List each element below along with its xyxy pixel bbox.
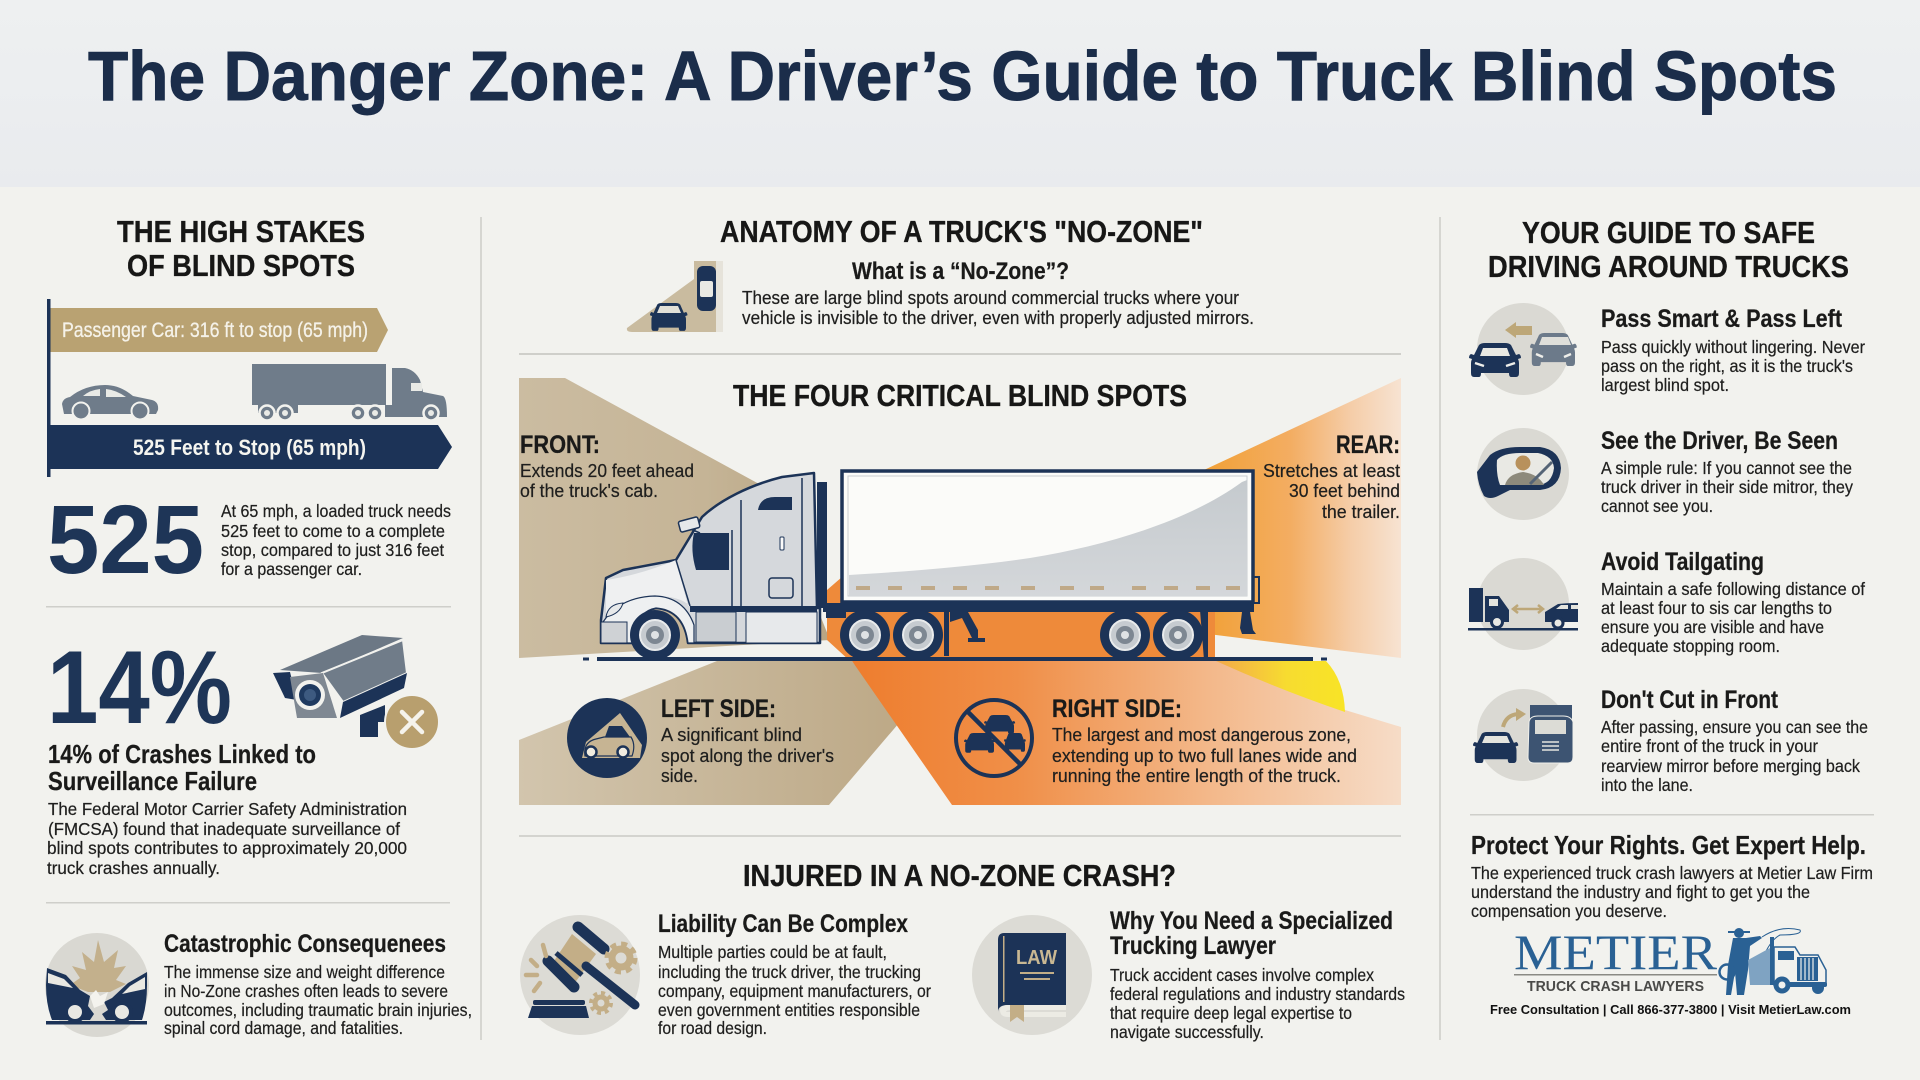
icon: car in blind spot [567, 698, 647, 778]
icon: top view cars in blind spot [627, 261, 723, 332]
label: front: of the truck's cab. [520, 480, 658, 501]
subheading: what is a no-zone: What is a “No-Zone”? [852, 258, 1069, 285]
text: don't cut in front [1601, 686, 1868, 795]
zone: yellow rear overlap [1216, 661, 1345, 712]
text: consequences description: spinal cord damage, and fatalities. [164, 1018, 403, 1038]
label: rear: 30 feet behind [1289, 480, 1400, 501]
heading: high stakes [117, 214, 365, 283]
text: 525 explanation: 525 feet to come to a complete [221, 521, 445, 541]
diagram: four blind spots around truck [519, 378, 1401, 805]
text: FMCSA finding: The Federal Motor Carrier Safety Administration [48, 799, 407, 819]
text: pass smart: Pass Smart & Pass Left [1601, 305, 1843, 333]
heading: anatomy: ANATOMY OF A TRUCK'S "NO-ZONE" [720, 214, 1203, 249]
icon: gavel [520, 915, 640, 1035]
cab [601, 473, 827, 643]
text: see the driver: A simple rule: If you cannot see the [1601, 458, 1852, 478]
text: left side: LEFT SIDE: [661, 695, 776, 723]
text: consequences description: The immense size and weight difference [164, 962, 445, 982]
label: rear: the trailer. [1322, 501, 1400, 522]
text: don't cut in front: entire front of the truck in your [1601, 736, 1818, 756]
wheels [630, 610, 1203, 660]
bar: passenger car stopping distance [50, 308, 388, 352]
subheading: 14 percent of crashes [48, 739, 316, 796]
text: FMCSA finding: truck crashes annually. [47, 858, 220, 878]
text: avoid tailgating: adequate stopping room. [1601, 636, 1780, 656]
icon: car crash [45, 933, 149, 1037]
text: liability: even government entities responsible [658, 1000, 920, 1020]
text: see the driver: See the Driver, Be Seen [1601, 427, 1838, 455]
text: specialized lawyer: that require deep legal expertise to [1110, 1003, 1352, 1023]
text: specialized lawyer: Truck accident cases involve complex [1110, 965, 1374, 985]
zone: under trailer overlap [827, 577, 1215, 661]
label: front: Extends 20 feet ahead [520, 460, 694, 481]
bar: passenger car stopping distance: Passenger Car: 316 ft to stop (65 mph) [62, 319, 368, 342]
stat: 525 feet: 525 [47, 485, 204, 594]
text: consequences description [164, 962, 472, 1038]
text: right side: extending up to two full lanes wide and [1052, 745, 1357, 766]
text: consequences description: in No-Zone crashes often leads to severe [164, 981, 448, 1001]
text: 525 explanation [221, 501, 451, 579]
text: left side: spot along the driver's [661, 745, 834, 766]
heading: your guide: DRIVING AROUND TRUCKS [1488, 249, 1849, 284]
logo: Metier truck crash lawyers: METIER [1514, 924, 1718, 980]
header band [0, 0, 1920, 187]
bar: truck stopping distance [48, 425, 452, 469]
trailer chassis [823, 603, 1256, 660]
text: right side: RIGHT SIDE: [1052, 695, 1182, 723]
icon: cowboy and truck [1720, 928, 1827, 995]
logo: Metier truck crash lawyers [1514, 924, 1827, 995]
text: don't cut in front: Don't Cut in Front [1601, 686, 1779, 714]
road line [597, 657, 1313, 661]
text: left side [661, 695, 834, 786]
label: front: FRONT: [520, 431, 600, 459]
panel: guide to safe driving [1468, 215, 1874, 1017]
icon: law book [972, 915, 1092, 1035]
text: specialized lawyer: Trucking Lawyer [1110, 932, 1276, 960]
zone: right side blind spot [852, 661, 1401, 805]
illustration: semi truck side view [583, 471, 1327, 660]
heading: four critical blind spots: THE FOUR CRITICAL BLIND SPOTS [733, 378, 1187, 413]
call to action: Protect Your Rights. Get Expert Help. [1471, 830, 1866, 860]
icon: passing cars [1469, 303, 1577, 395]
bar: truck stopping distance: 525 Feet to Stop (65 mph) [133, 435, 366, 460]
zone: front blind spot [519, 378, 830, 658]
callout: left side [567, 695, 834, 786]
label: rear: Stretches at least [1263, 460, 1400, 481]
call to action: understand the industry and fight to get you the [1471, 882, 1810, 902]
title: The Danger Zone: A Driver’s Guide to Truck Blind Spots [88, 37, 1837, 115]
text: no-zone definition: These are large blind spots around commercial trucks where your [742, 287, 1239, 308]
text: avoid tailgating: at least four to sis car lengths to [1601, 598, 1832, 618]
text: FMCSA finding: (FMCSA) found that inadequate surveillance of [48, 819, 400, 839]
text: right side [1052, 695, 1357, 786]
icon: passenger car [62, 385, 158, 420]
text: specialized lawyer: Why You Need a Specialized [1110, 907, 1393, 935]
zone: rear blind spot [1200, 378, 1401, 658]
text: don't cut in front: into the lane. [1601, 775, 1693, 795]
text: 525 explanation: stop, compared to just 316 feet [221, 540, 444, 560]
text: liability: company, equipment manufacturers, or [658, 981, 931, 1001]
subheading: 14 percent of crashes: 14% of Crashes Linked to [48, 739, 316, 769]
heading: high stakes: THE HIGH STAKES [117, 214, 365, 249]
icon: law book: LAW [1016, 947, 1057, 969]
stat: 14 percent: 14% [47, 630, 232, 746]
label: rear [1263, 431, 1400, 522]
text: consequences description: outcomes, including traumatic brain injuries, [164, 1000, 472, 1020]
text: pass smart [1601, 305, 1865, 395]
text: no-zone definition [742, 287, 1254, 328]
subheading: catastrophic consequences: Catastrophic Consequenees [164, 930, 446, 958]
icon: semi truck [252, 364, 447, 420]
text: specialized lawyer [1110, 907, 1405, 1042]
text: liability: Multiple parties could be at fault, [658, 942, 887, 962]
text: right side: The largest and most dangerous zone, [1052, 724, 1351, 745]
text: pass smart: Pass quickly without lingering. Never [1601, 337, 1865, 357]
panel: anatomy of a no-zone [519, 214, 1405, 1042]
text: 525 explanation: for a passenger car. [221, 559, 362, 579]
text: liability: for road design. [658, 1018, 767, 1038]
text: liability [658, 910, 931, 1038]
text: FMCSA finding: blind spots contributes to approximately 20,000 [47, 838, 407, 858]
text: pass smart: pass on the right, as it is the truck's [1601, 356, 1853, 376]
text: left side: side. [661, 765, 698, 786]
call to action: compensation you deserve. [1471, 901, 1667, 921]
subheading: 14 percent of crashes: Surveillance Failure [48, 766, 257, 796]
logo: Metier truck crash lawyers: TRUCK CRASH LAWYERS [1527, 978, 1704, 995]
text: avoid tailgating: Avoid Tailgating [1601, 548, 1764, 576]
section: injured in a no-zone crash [520, 858, 1405, 1042]
text: FMCSA finding [47, 799, 407, 878]
text: pass smart: largest blind spot. [1601, 375, 1729, 395]
text: liability: including the truck driver, the trucking [658, 962, 921, 982]
text: see the driver: truck driver in their side mitror, they [1601, 477, 1853, 497]
icon: following distance [1468, 558, 1578, 650]
icon: no cars sign [956, 700, 1032, 776]
heading: high stakes: OF BLIND SPOTS [127, 248, 355, 283]
trailer [842, 471, 1259, 603]
icon: car merging in front of truck [1473, 689, 1573, 781]
text: 525 explanation: At 65 mph, a loaded truck needs [221, 501, 451, 521]
text: specialized lawyer: navigate successfully. [1110, 1022, 1264, 1042]
text: don't cut in front: rearview mirror before merging back [1601, 756, 1860, 776]
zone: left side blind spot [519, 661, 899, 805]
callout: right side [956, 695, 1357, 786]
icon: surveillance camera with X [273, 635, 439, 749]
text: don't cut in front: After passing, ensure you can see the [1601, 717, 1868, 737]
text: right side: running the entire length of the truck. [1052, 765, 1341, 786]
panel: the high stakes of blind spots [45, 214, 472, 1038]
text: see the driver: cannot see you. [1601, 496, 1713, 516]
text: liability: Liability Can Be Complex [658, 910, 908, 938]
heading: your guide: YOUR GUIDE TO SAFE [1522, 215, 1815, 250]
label: rear: REAR: [1336, 431, 1400, 459]
icon: side mirror with driver [1477, 428, 1569, 520]
label: front [520, 431, 694, 501]
text: avoid tailgating [1601, 548, 1865, 656]
text: no-zone definition: vehicle is invisible to the driver, even with properly adjusted mirrors. [742, 307, 1254, 328]
chart: stopping distance comparison [47, 299, 452, 477]
text: specialized lawyer: federal regulations and industry standards [1110, 984, 1405, 1004]
call to action: The experienced truck crash lawyers at Metier Law Firm [1471, 863, 1873, 883]
text: left side: A significant blind [661, 724, 802, 745]
text: see the driver [1601, 427, 1853, 516]
text: avoid tailgating: Maintain a safe following distance of [1601, 579, 1865, 599]
call to action [1471, 830, 1873, 921]
heading: injured: INJURED IN A NO-ZONE CRASH? [743, 858, 1176, 893]
text: avoid tailgating: ensure you are visible and have [1601, 617, 1824, 637]
heading: your guide [1488, 215, 1849, 284]
contact line: Free Consultation | Call 866-377-3800 | Visit MetierLaw.com [1490, 1002, 1851, 1017]
